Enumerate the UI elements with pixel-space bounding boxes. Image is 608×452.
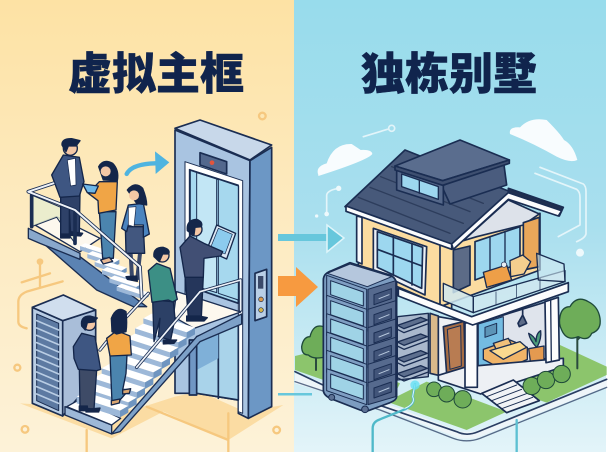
title: virtual host: 虚拟主框	[68, 50, 244, 99]
icon: elevator tower	[175, 120, 272, 418]
lower staircase railing	[100, 280, 241, 367]
bushes	[427, 365, 570, 408]
arrow: orange main arrow	[278, 267, 318, 307]
ground: lawn and path	[295, 345, 607, 441]
house: roof	[345, 140, 563, 249]
person: man in green sweater	[148, 247, 177, 344]
decorative ground and circuit lines	[14, 113, 283, 452]
icon: curved blue arrow	[127, 151, 169, 174]
icon: clouds	[318, 119, 577, 176]
illustration: detached villa side	[295, 119, 607, 452]
person: woman in orange top	[83, 161, 118, 264]
decorative dots	[315, 186, 584, 257]
porch, columns and entrance stairs	[438, 297, 563, 413]
connection cable with glow	[373, 380, 517, 452]
line: lower teal connector	[278, 393, 312, 396]
icon: server rack	[323, 263, 397, 413]
icon: server cabinet	[32, 295, 96, 416]
icon: storage shelves behind rack	[397, 313, 428, 381]
arrow: upper teal connector	[278, 225, 344, 252]
illustration: virtual host side	[14, 113, 283, 452]
house: walls and floors	[357, 200, 547, 375]
person: man at top landing	[52, 139, 84, 238]
balcony with furniture and glass railing	[398, 253, 568, 325]
person: man at bottom of stairs	[73, 316, 101, 412]
person: woman in blue jacket	[122, 185, 149, 281]
decorative tech lines	[327, 125, 586, 242]
furniture: sofa and plant	[483, 331, 544, 370]
panel: left background	[0, 0, 294, 452]
upper staircase and landing	[28, 195, 149, 307]
person: man with tablet	[180, 219, 236, 321]
panel: right background	[294, 0, 606, 452]
upper staircase railing	[28, 183, 142, 297]
person: woman in orange on lower stairs	[107, 309, 131, 405]
icon: trees	[302, 299, 600, 370]
lower staircase and landing	[65, 292, 242, 434]
title: detached villa: 独栋别墅	[361, 50, 537, 99]
